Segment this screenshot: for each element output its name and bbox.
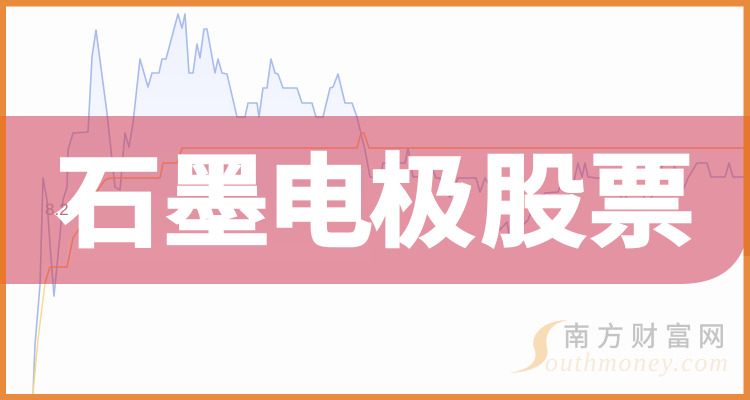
orange trend line [45,133,750,283]
title banner [0,116,750,284]
chart area fill [67,14,370,260]
watermark domain: outhmoney.com [545,348,730,377]
axis value label: 8.2 [45,200,69,219]
yellow rising line [33,283,45,394]
watermark: southmoney logo [509,320,730,377]
logo swoosh [509,320,568,373]
watermark chinese name: 南方财富网 [563,322,725,352]
title: 石墨电极股票 [55,147,695,260]
